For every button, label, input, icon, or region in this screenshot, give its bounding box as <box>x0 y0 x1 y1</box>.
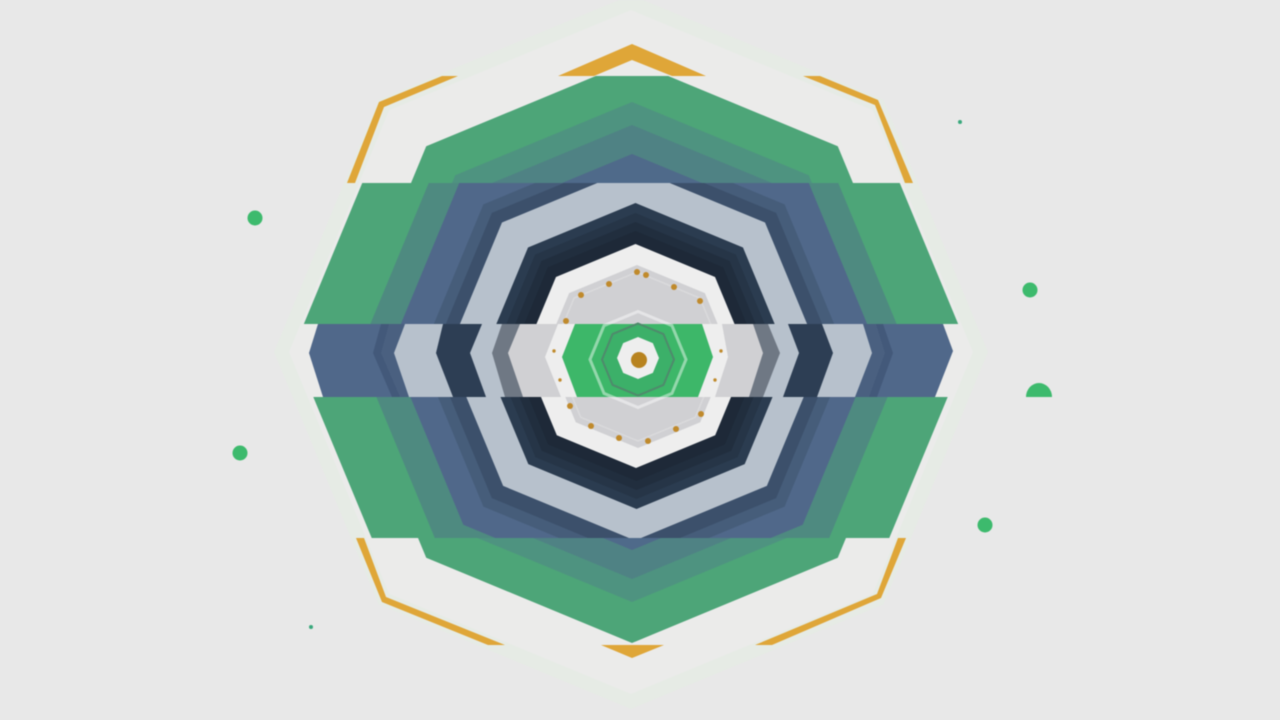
upper band: concentric octagons <box>303 182 959 325</box>
core: nested octagon rings and gold center <box>590 312 686 408</box>
center band: horizontal chevron layers <box>309 324 953 397</box>
top and bottom band: green octagon layers <box>410 75 854 644</box>
lower band: concentric octagons <box>312 396 948 539</box>
gold broken octagon outline <box>347 44 913 658</box>
gold dots around the core <box>552 269 723 444</box>
floating green particles <box>232 120 1052 629</box>
pale outer octagon ring <box>274 0 988 709</box>
